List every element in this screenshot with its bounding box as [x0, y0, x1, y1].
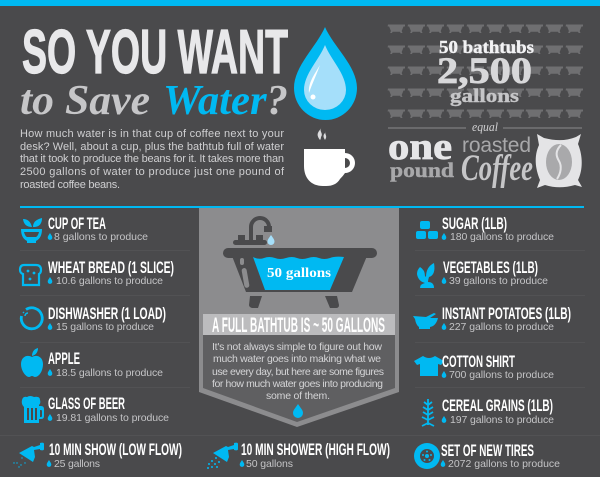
icon: mortar bowl — [413, 313, 438, 329]
item: wheat bread — [20, 258, 174, 287]
icon: bathtub: 50 gallons — [267, 266, 332, 281]
explainer text — [212, 341, 384, 402]
item: wheat bread: 10.6 gallons to produce — [56, 275, 163, 287]
title: Water? — [163, 78, 288, 124]
item: beer: 19.81 gallons to produce — [56, 412, 169, 424]
one pound roasted coffee: one — [388, 126, 452, 168]
explainer text: much water goes into making what we — [213, 353, 381, 365]
item: sugar: SUGAR (1LB) — [442, 214, 507, 233]
panel: bathtub — [199, 208, 399, 427]
item: cereal grains: 197 gallons to produce — [450, 414, 554, 426]
icon: large water drop — [294, 27, 357, 120]
explainer text: It's not always simple to figure out how — [212, 341, 382, 353]
item: low flow shower: 25 gallons — [54, 458, 100, 470]
item: sugar — [416, 214, 554, 243]
item: cup of tea: 8 gallons to produce — [54, 231, 148, 243]
2,500 gallons stat: gallons — [450, 86, 519, 107]
intro text: 2500 gallons of water to produce just one pound of — [20, 166, 285, 178]
title: to Save — [20, 78, 150, 124]
icon: small drop — [293, 404, 303, 418]
intro text: roasted coffee beans. — [20, 179, 120, 191]
label band — [203, 314, 395, 335]
item: cotton shirt — [414, 352, 554, 381]
item: dishwasher: DISHWASHER (1 LOAD) — [48, 304, 166, 323]
intro text: desk? Well, about a cup, plus the bathtub full of water — [20, 141, 284, 153]
item: new tires: 2072 gallons to produce — [448, 458, 560, 470]
item: vegetables: 39 gallons to produce — [449, 275, 548, 287]
intro text: How much water is in that cup of coffee next to your — [20, 128, 284, 140]
icon: bathtub — [223, 248, 377, 308]
2,500 gallons stat: 2,500 — [437, 51, 532, 92]
item: high flow shower: 10 MIN SHOWER (HIGH FLOW) — [241, 440, 390, 459]
panel: bathtub: A FULL BATHTUB IS ~ 50 GALLONS — [212, 314, 385, 337]
bathtub grid — [388, 24, 583, 118]
icon: sugar cubes — [416, 221, 438, 239]
item: instant potatoes — [413, 304, 571, 333]
item: sugar: 180 gallons to produce — [450, 231, 554, 243]
intro text: that it took to produce the beans for it. It takes more than — [20, 153, 284, 165]
item: dishwasher — [21, 304, 166, 333]
item: new tires: SET OF NEW TIRES — [441, 441, 534, 460]
item: high flow shower — [207, 440, 390, 470]
2,500 gallons stat: 50 bathtubs — [439, 37, 534, 57]
item: low flow shower — [13, 440, 182, 470]
icon: tire — [414, 443, 440, 469]
item: cotton shirt: COTTON SHIRT — [442, 352, 515, 371]
icon: bread — [20, 265, 41, 285]
section divider — [20, 206, 584, 208]
item: apple — [21, 348, 163, 379]
intro text — [20, 128, 285, 191]
item: vegetables — [417, 258, 548, 288]
icon: coffee bag — [536, 134, 582, 188]
one pound roasted coffee — [388, 126, 533, 189]
one pound roasted coffee: roasted — [462, 134, 531, 157]
item: cup of tea: CUP OF TEA — [48, 214, 106, 233]
item: dishwasher: 15 gallons to produce — [56, 321, 154, 333]
explainer text: some of them. — [266, 390, 330, 402]
item: instant potatoes: 227 gallons to produce — [449, 321, 554, 333]
item: cup of tea — [21, 214, 148, 243]
2,500 gallons stat — [437, 37, 534, 107]
icon: vegetables — [417, 263, 434, 288]
icon: beer — [22, 396, 44, 423]
top bar — [0, 0, 600, 6]
icon: shower head high flow — [207, 443, 238, 469]
icon: apple — [21, 348, 43, 377]
item: low flow shower: 10 MIN SHOW (LOW FLOW) — [49, 440, 182, 459]
item: cereal grains — [422, 396, 554, 426]
row separators — [0, 250, 600, 436]
explainer text: use every day, but here are some figures — [212, 366, 384, 378]
icon: dishwasher — [21, 308, 42, 329]
item: cotton shirt: 700 gallons to produce — [449, 369, 554, 381]
title: SO YOU WANT — [22, 18, 288, 87]
explainer text: for how much water goes into producing — [212, 378, 383, 390]
icon: shirt — [414, 356, 444, 376]
item: new tires — [414, 441, 560, 470]
title — [20, 18, 288, 124]
item: apple: 18.5 gallons to produce — [56, 367, 163, 379]
equal divider: equal — [472, 119, 498, 134]
item: wheat bread: WHEAT BREAD (1 SLICE) — [48, 258, 174, 277]
icon: faucet — [233, 218, 274, 245]
one pound roasted coffee: Coffee — [461, 148, 533, 189]
icon: shower head low flow — [13, 443, 44, 468]
icon: coffee cup — [304, 127, 355, 186]
icon: grain — [422, 399, 434, 426]
item: high flow shower: 50 gallons — [246, 458, 293, 470]
item: apple: APPLE — [48, 349, 80, 368]
icon: tea — [21, 218, 42, 243]
panel inner — [203, 335, 395, 422]
item: beer — [22, 394, 169, 424]
item: beer: GLASS OF BEER — [48, 394, 125, 413]
one pound roasted coffee: pound — [390, 158, 454, 182]
